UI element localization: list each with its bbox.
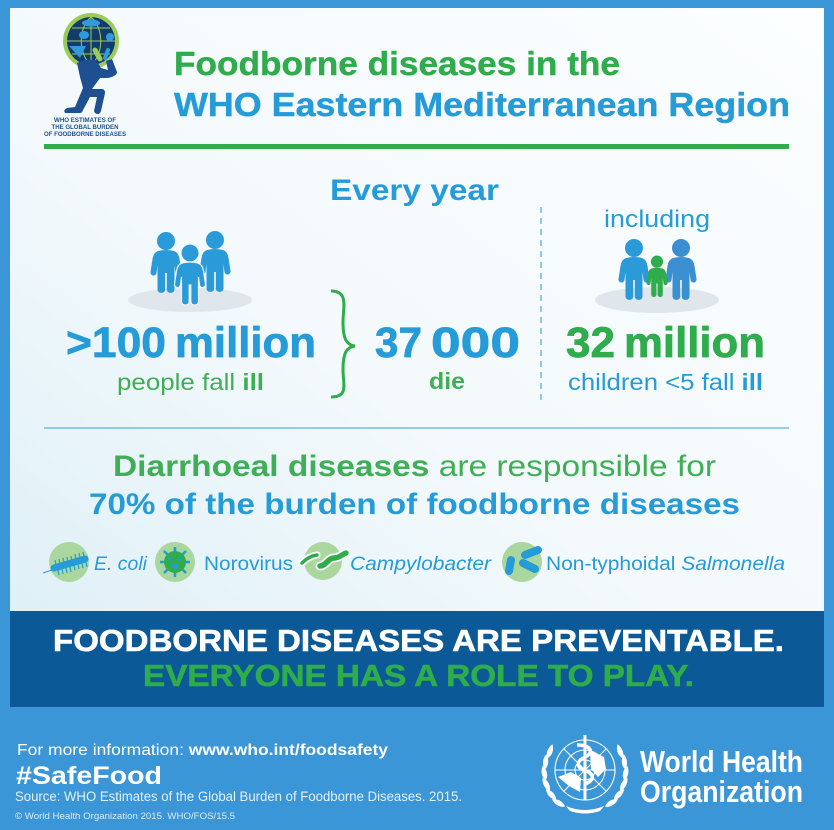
icon: global burden logo: [44, 13, 126, 138]
WHO wordmark: World Health: [640, 744, 803, 779]
diarrhoeal diseases statement: [89, 450, 740, 521]
pathogen: Campylobacter: [302, 542, 492, 580]
logo caption: [44, 118, 126, 138]
icon: WHO emblem: [540, 735, 630, 814]
stat: 32 million children: million: [624, 319, 765, 367]
stat: over 100 million ill: million: [175, 319, 316, 367]
WHO wordmark: [640, 744, 803, 809]
diarrhoeal diseases statement: 70% of the burden of foodborne diseases: [89, 488, 740, 521]
stat: over 100 million ill: people fall ill: [117, 369, 264, 395]
logo caption: THE GLOBAL BURDEN: [52, 125, 118, 131]
pathogen: E. coli: [43, 542, 148, 582]
footer text: Source: WHO Estimates of the Global Burden of Foodborne Diseases. 2015.: [15, 789, 462, 804]
banner: EVERYONE HAS A ROLE TO PLAY.: [143, 658, 694, 693]
footer text: © World Health Organization 2015. WHO/FOS/15.5: [15, 811, 235, 822]
footer text: [15, 742, 462, 822]
footer text: For more information: www.who.int/foodsafety: [17, 742, 388, 759]
pathogen: Non-typhoidal Salmonella: [502, 542, 785, 582]
stat: 32 million children: children <5 fall ill: [568, 369, 763, 395]
footer text: #SafeFood: [16, 762, 162, 790]
pathogen: Campylobacter: Campylobacter: [350, 554, 492, 575]
stat: over 100 million ill: [66, 319, 316, 395]
stat: 37 000 die: [375, 319, 520, 394]
stat: 37 000 die: 37: [375, 319, 422, 367]
logo caption: WHO ESTIMATES OF: [54, 118, 116, 124]
pathogen: E. coli: E. coli: [94, 554, 148, 575]
pathogen: Non-typhoidal Salmonella: Non-typhoidal Salmonella: [546, 554, 785, 575]
stat: over 100 million ill: >100: [66, 319, 166, 367]
pathogen: Norovirus: [155, 542, 293, 582]
stat: 32 million children: [566, 319, 765, 395]
banner: FOODBORNE DISEASES ARE PREVENTABLE.: [53, 623, 784, 658]
stat: 37 000 die: die: [429, 368, 465, 394]
diarrhoeal diseases statement: Diarrhoeal diseases are responsible for: [113, 450, 716, 483]
brace: [331, 291, 355, 397]
logo caption: OF FOODBORNE DISEASES: [44, 132, 126, 138]
icon: group of people: [128, 231, 252, 312]
icon: family with child: [595, 239, 719, 313]
title: [174, 45, 790, 123]
stat: 37 000 die: 000: [431, 319, 520, 367]
stat: 32 million children: 32: [566, 319, 615, 367]
title: Foodborne diseases in the: [174, 45, 620, 82]
label: including: including: [604, 206, 710, 233]
title: WHO Eastern Mediterranean Region: [174, 86, 790, 123]
banner: [10, 611, 824, 707]
pathogen: Norovirus: Norovirus: [204, 554, 293, 575]
WHO wordmark: Organization: [640, 774, 803, 809]
panel: main content background: [10, 8, 824, 611]
heading: every year: Every year: [330, 174, 499, 207]
